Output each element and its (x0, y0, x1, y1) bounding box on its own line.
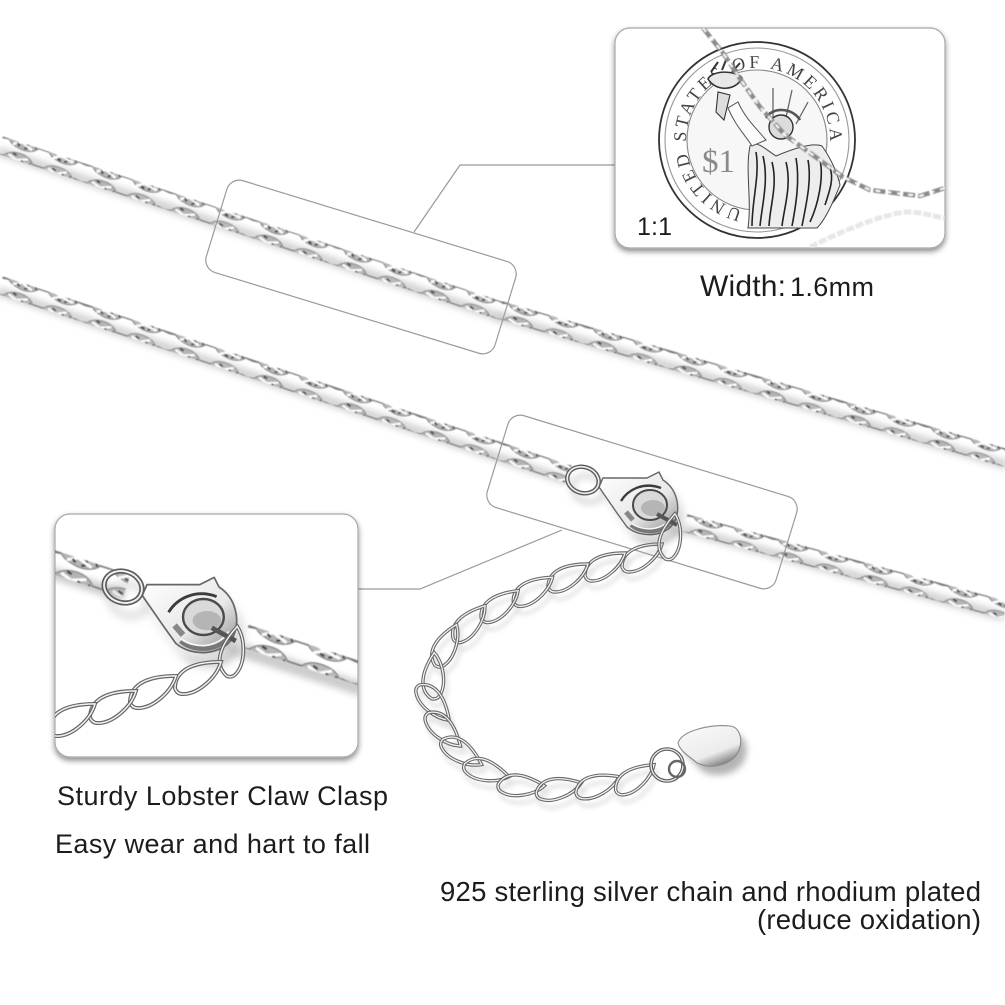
callout frame: chain width detail (203, 165, 615, 357)
material description: 925 sterling silver chain and rhodium plated (440, 876, 981, 907)
scale label: 1:1 (637, 213, 672, 241)
panel: clasp close-up (46, 514, 366, 757)
material description: (reduce oxidation) (757, 904, 981, 935)
width label: 1.6mm (790, 272, 874, 302)
clasp close-up photo (46, 550, 366, 736)
coin (658, 28, 945, 248)
extender chain (412, 544, 665, 816)
coin: UNITED STATES OF AMERICA (674, 56, 842, 222)
width label: Width: (700, 270, 786, 303)
panel: coin size comparison (610, 26, 950, 256)
coin: $1 (702, 144, 735, 180)
clasp subheading: Easy wear and hart to fall (55, 829, 370, 859)
lower chain (0, 276, 1005, 621)
callout frame: clasp detail (358, 412, 800, 592)
heart charm (651, 726, 747, 781)
upper chain (0, 136, 1005, 469)
material description (440, 876, 981, 935)
clasp heading: Sturdy Lobster Claw Clasp (57, 781, 388, 811)
width label (700, 270, 874, 303)
lobster claw clasp (564, 463, 696, 562)
